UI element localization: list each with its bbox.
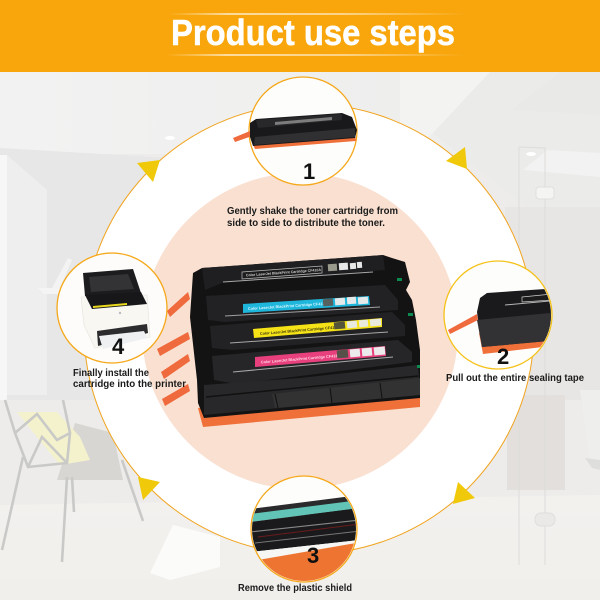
text: step 1 instruction [227, 206, 398, 229]
black label icons [328, 262, 362, 271]
main image: four toner cartridges [157, 255, 420, 427]
cyan label [243, 296, 370, 313]
text: step 3 instruction: Remove the plastic shield [238, 583, 352, 594]
panel: step 4 [57, 253, 167, 363]
step 4 number: 4 [112, 334, 125, 359]
text: step 2 instruction: Pull out the entire sealing tape [446, 373, 584, 384]
lower cartridge housing [204, 365, 420, 415]
text: step 4 instruction: Finally install the [73, 368, 149, 379]
magenta label icons [337, 346, 385, 358]
panel: step 3 [250, 476, 360, 590]
magenta label: Color LaserJet BlackPrint Cartridge CF413A [261, 354, 341, 364]
magenta label [255, 346, 386, 367]
text: step 1 instruction: Gently shake the toner cartridge from [227, 206, 398, 217]
panel: step 2 [444, 261, 560, 369]
yellow label icons [334, 318, 381, 329]
step 4 printer [81, 269, 150, 349]
step 2 cartridge [448, 288, 560, 354]
black label: Color LaserJet BlackPrint Cartridge CF410A [246, 268, 322, 277]
step 3 number: 3 [307, 543, 319, 568]
panel: step 1 [233, 77, 357, 185]
text: step 1 instruction: side to side to distribute the toner. [227, 218, 385, 229]
cyan cartridge [206, 285, 398, 322]
black label [242, 266, 322, 279]
yellow label: Color LaserJet BlackPrint Cartridge CF412A [260, 325, 340, 336]
text: step 4 instruction [73, 368, 186, 390]
arrow: step 2 to step 3 [453, 482, 475, 504]
title: Product use steps [171, 12, 455, 53]
cyan label icons [323, 297, 368, 306]
magenta cartridge [212, 340, 412, 384]
text: step 4 instruction: cartridge into the printer [73, 379, 186, 390]
black cartridge [202, 255, 385, 290]
sealing tapes [157, 292, 190, 406]
cyan label: Color LaserJet BlackPrint Cartridge CF411A [248, 302, 327, 311]
arrow: step 3 to step 4 [138, 477, 160, 500]
orange base [198, 385, 420, 427]
large white process ring [84, 104, 534, 554]
green end latches [397, 278, 420, 368]
step 2 number: 2 [497, 344, 509, 369]
header banner [0, 0, 600, 72]
arrow: step 1 to step 2 [446, 147, 467, 169]
step 1 cartridge [233, 113, 357, 149]
cartridge stack body [190, 255, 420, 418]
yellow label [253, 318, 382, 338]
peach centre disc [142, 173, 458, 489]
step 3 drum close-up [252, 496, 356, 581]
arrow: step 4 to step 1 [137, 160, 160, 182]
step 1 number: 1 [303, 159, 315, 184]
yellow cartridge [210, 312, 405, 350]
